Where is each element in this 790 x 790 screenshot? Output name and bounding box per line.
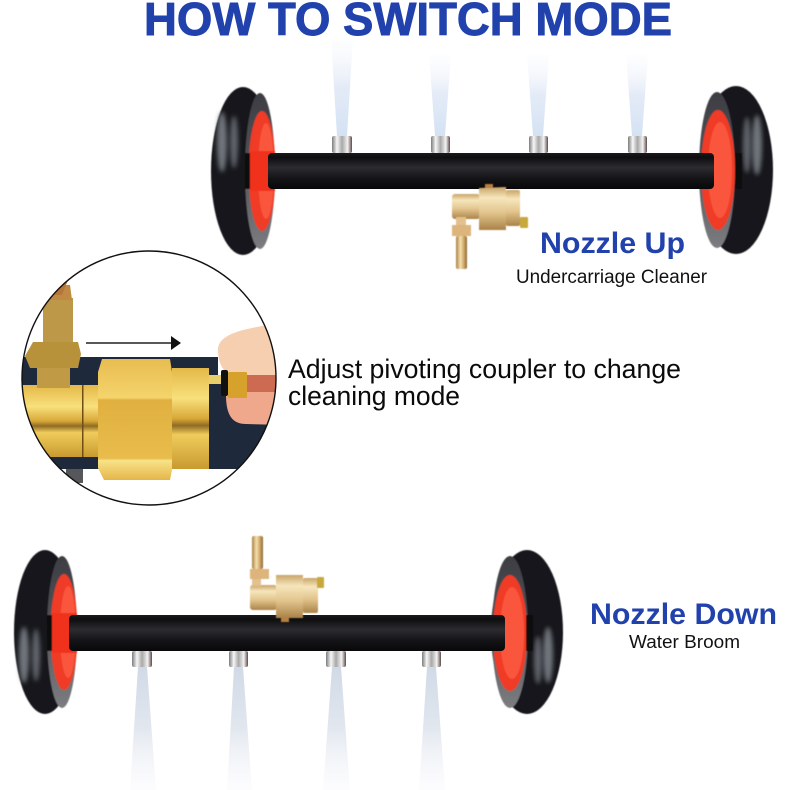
detail circle: pivoting coupler close-up — [20, 251, 285, 505]
small dark part bottom left — [66, 469, 83, 483]
left wheel — [14, 550, 78, 714]
pipe — [69, 615, 505, 651]
vertical fitting upper — [43, 298, 73, 343]
knurled screw — [228, 372, 247, 398]
water sprays down — [130, 667, 445, 790]
label: nozzle down: Nozzle Down — [590, 598, 777, 631]
bottom assembly: nozzle down — [14, 536, 563, 790]
left wheel — [211, 87, 276, 255]
right wheel — [491, 550, 563, 714]
arrow — [86, 336, 181, 350]
pivoting coupler — [452, 184, 528, 269]
label: water broom: Water Broom — [629, 632, 740, 652]
top assembly: nozzle up — [211, 38, 773, 269]
nozzles — [332, 136, 647, 153]
instruction text: Adjust pivoting coupler to change — [288, 354, 681, 384]
water sprays up — [331, 38, 648, 136]
brass left cylinder — [20, 385, 83, 457]
label: undercarriage cleaner: Undercarriage Cleaner — [516, 267, 708, 288]
black ring — [221, 370, 228, 396]
brass right collar — [172, 368, 209, 469]
finger lower — [226, 392, 274, 425]
brass hex nut — [98, 359, 172, 480]
nozzles — [132, 651, 441, 667]
navy pipe — [20, 357, 280, 469]
circle outline — [22, 251, 276, 505]
right wheel — [699, 86, 773, 254]
instruction text — [288, 354, 681, 411]
instruction text: cleaning mode — [288, 381, 460, 411]
label: nozzle up: Nozzle Up — [540, 227, 685, 260]
adjuster rod — [209, 375, 221, 384]
finger upper — [218, 326, 276, 375]
pipe — [268, 153, 714, 189]
hex nut on fitting — [25, 342, 81, 368]
pivoting coupler — [250, 536, 324, 622]
